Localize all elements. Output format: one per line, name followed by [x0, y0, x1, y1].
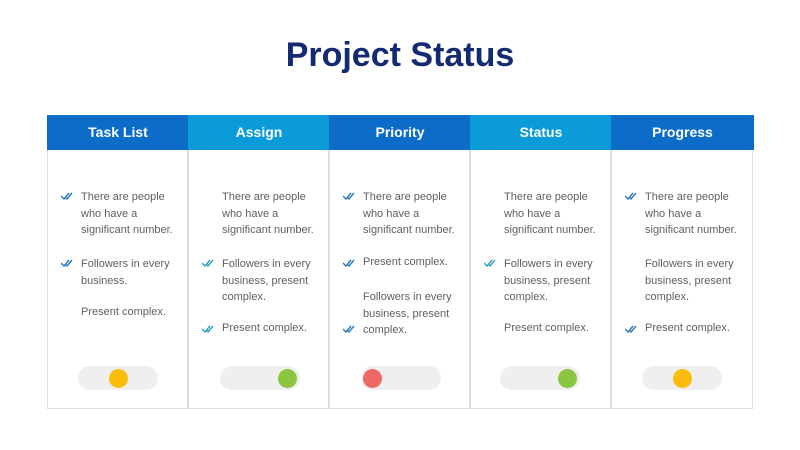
header: status: Status	[520, 124, 562, 140]
text item 1: who have a	[222, 208, 278, 220]
toggle: green	[500, 366, 580, 390]
text item 1: significant number.	[645, 224, 737, 236]
toggle: yellow	[78, 366, 158, 390]
text item 1: There are people	[363, 191, 447, 203]
text item 1: who have a	[363, 208, 419, 220]
text item 1	[504, 191, 596, 236]
header: priority: Priority	[375, 124, 424, 140]
check icon	[343, 192, 354, 200]
text item 1	[222, 191, 314, 236]
text item 2: business, present	[222, 274, 308, 286]
text item 2: Followers in every	[222, 258, 311, 270]
text item 1: significant number.	[81, 224, 173, 236]
text item 1: significant number.	[222, 224, 314, 236]
panel: status	[470, 115, 611, 409]
text item 1: There are people	[81, 191, 165, 203]
text item 3: Present complex.	[222, 322, 307, 334]
text item 2	[645, 258, 734, 303]
text item 3: Present complex.	[81, 306, 166, 318]
toggle: red	[361, 366, 441, 390]
text item 1: significant number.	[504, 224, 596, 236]
check icon	[202, 260, 214, 267]
check icon	[625, 326, 636, 333]
text item 2: business.	[81, 274, 127, 286]
check icon	[625, 192, 636, 200]
text item 2: Followers in every	[645, 258, 734, 270]
text item 1: significant number.	[363, 224, 455, 236]
text item 2: Followers in every	[81, 258, 170, 270]
header: assign	[188, 115, 330, 150]
text item 3: complex.	[363, 324, 407, 336]
text item 1: There are people	[504, 191, 588, 203]
panel: progress	[611, 115, 753, 409]
text item 2	[81, 258, 170, 286]
text item 2: business, present	[504, 274, 590, 286]
text item 2: complex.	[504, 291, 548, 303]
text item 2: Present complex.	[363, 256, 448, 268]
header: progress: Progress	[652, 124, 713, 140]
header: task list: Task List	[88, 124, 148, 140]
text item 1: who have a	[504, 208, 560, 220]
text item 2: business, present	[645, 274, 731, 286]
text item 1: There are people	[645, 191, 729, 203]
panel: task list	[47, 115, 188, 409]
check icon	[343, 260, 354, 267]
text item 2: complex.	[645, 291, 689, 303]
text item 1	[645, 191, 737, 236]
text item 2	[222, 258, 311, 303]
text item 2: complex.	[222, 291, 266, 303]
check icon	[61, 192, 72, 200]
text item 1: who have a	[81, 208, 137, 220]
header: task list	[47, 115, 189, 150]
text item 3: Present complex.	[504, 322, 589, 334]
text item 2	[504, 258, 593, 303]
text item 1: There are people	[222, 191, 306, 203]
toggle: yellow	[642, 366, 722, 390]
text item 3: Present complex.	[645, 322, 730, 334]
header: priority	[329, 115, 471, 150]
check icon	[61, 260, 72, 267]
title: Project Status	[286, 36, 514, 74]
header: progress	[611, 115, 754, 150]
text item 3: Followers in every	[363, 291, 452, 303]
check icon	[202, 326, 214, 333]
header: assign: Assign	[236, 124, 282, 140]
text item 1: who have a	[645, 208, 701, 220]
header: status	[470, 115, 612, 150]
panel: priority	[329, 115, 470, 409]
text item 3	[363, 291, 452, 336]
panel: assign	[188, 115, 329, 409]
text item 2: Followers in every	[504, 258, 593, 270]
toggle: green	[220, 366, 300, 390]
check icon	[343, 326, 354, 333]
text item 1	[363, 191, 455, 236]
text item 1	[81, 191, 173, 236]
check icon	[484, 260, 496, 267]
text item 3: business, present	[363, 308, 449, 320]
